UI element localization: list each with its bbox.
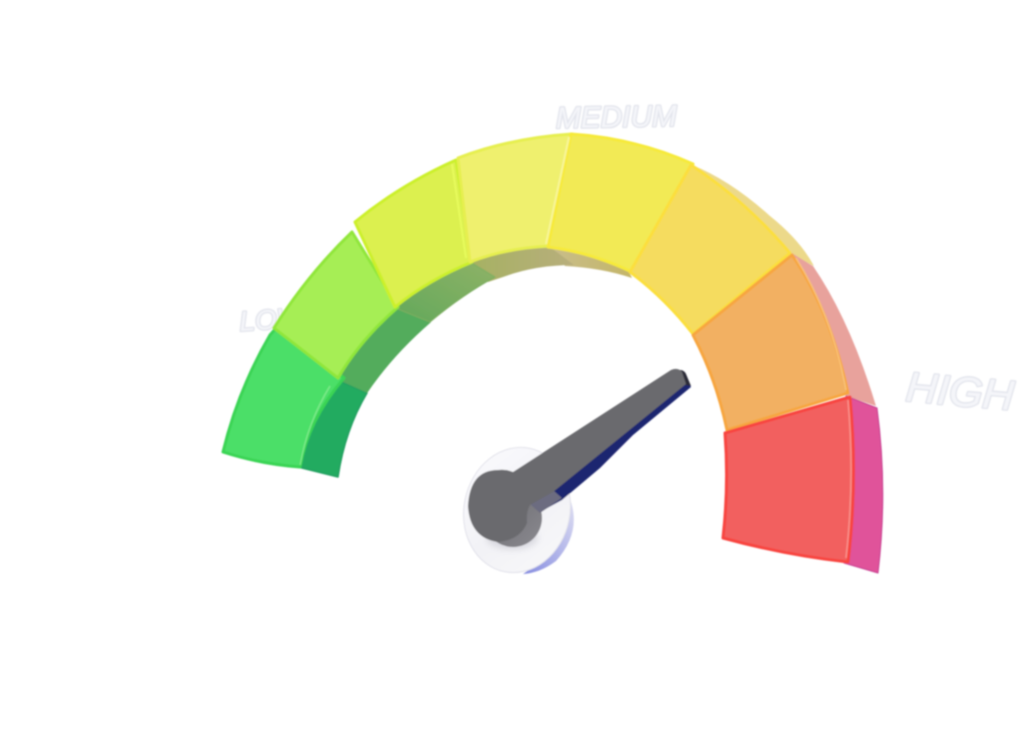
hub shadow (486, 526, 538, 550)
segment 3 side (393, 260, 495, 322)
segment 8 side: magenta (844, 396, 883, 573)
segment 7 front: orange (693, 255, 848, 430)
segment 5 front: yellow (548, 134, 693, 272)
segment 8 front: red (723, 397, 854, 562)
hub side (484, 489, 542, 547)
segment 6 back face (692, 165, 814, 266)
highlight edges (546, 137, 569, 244)
label: MEDIUM: MEDIUM (556, 100, 677, 135)
blue to grey fade (530, 491, 562, 513)
label: LOW: LOW (238, 301, 307, 337)
segment 2 front: lime green (274, 232, 398, 378)
dial rim (523, 494, 574, 574)
segment 3 front: yellow-green (355, 160, 472, 307)
gauge arc (223, 134, 883, 573)
needle and dial (452, 369, 691, 583)
segment 1 side: dark green (298, 376, 367, 477)
segment 5 side (550, 245, 632, 278)
label: HIGH: HIGH (904, 363, 1017, 419)
dial base disc (452, 437, 582, 583)
segment 4 side (468, 244, 574, 282)
segment 2 side: mid green (336, 300, 430, 392)
segment 7 side: pink (790, 252, 876, 406)
segment 4 front: pale yellow (458, 134, 572, 262)
needle face (468, 369, 686, 542)
segment 1 front: green (223, 327, 344, 467)
segment 6 front: warm yellow (630, 165, 790, 334)
needle blue side (540, 372, 691, 512)
needle tip edge (680, 370, 691, 386)
